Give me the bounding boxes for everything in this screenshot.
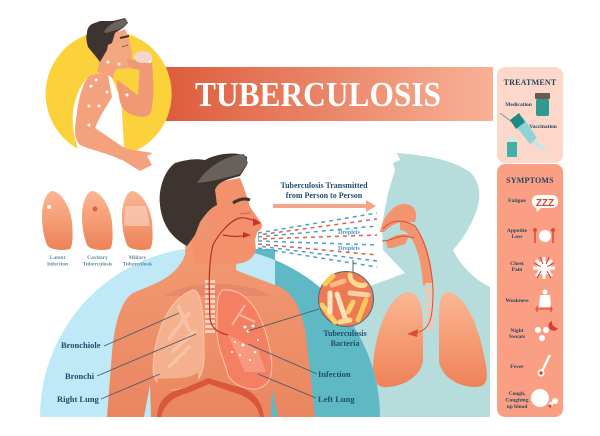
label: Cavitory bbox=[87, 255, 108, 261]
hair bbox=[160, 154, 247, 246]
ear bbox=[196, 214, 214, 238]
label: Latent bbox=[50, 255, 65, 261]
title banner bbox=[165, 67, 493, 121]
panel: treatment: Medication bbox=[505, 102, 532, 108]
labels: Bronchiole bbox=[61, 340, 101, 350]
label: Infection bbox=[47, 262, 68, 268]
tuberculosis bacteria label: Bacteria bbox=[331, 339, 359, 348]
ghost airway bbox=[380, 204, 433, 337]
panel: symptoms: Night bbox=[510, 328, 524, 334]
icon: fatigue speech bubble bbox=[532, 195, 558, 212]
head bbox=[178, 178, 262, 264]
labels: Right Lung bbox=[57, 394, 100, 404]
panel: symptoms: Sweats bbox=[509, 334, 525, 340]
labels: Bronchi bbox=[65, 371, 95, 381]
panel: symptoms: Weakness bbox=[505, 298, 529, 304]
panel: symptoms bbox=[497, 164, 563, 417]
title: TUBERCULOSIS bbox=[195, 75, 441, 114]
icon: coughing man on yellow circle bbox=[46, 18, 172, 171]
panel: treatment: Vaccination bbox=[529, 124, 557, 130]
panel: treatment bbox=[497, 67, 563, 163]
droplets labels bbox=[338, 230, 361, 252]
label: Tuberculosis bbox=[83, 262, 112, 268]
bacteria magnifier bbox=[318, 260, 374, 326]
panel: symptoms: Fatigue bbox=[508, 198, 526, 204]
icon: vial bbox=[507, 137, 517, 157]
main figure bbox=[107, 154, 315, 417]
diaphragm bbox=[157, 378, 264, 417]
torso bbox=[107, 232, 315, 417]
ghost silhouette second person bbox=[340, 153, 490, 417]
transmission arrow bbox=[273, 181, 376, 212]
left lung bbox=[217, 290, 272, 389]
heading: TREATMENT bbox=[504, 78, 557, 87]
small lung: miliary tuberculosis bbox=[122, 191, 153, 268]
ghost lungs bbox=[373, 292, 487, 387]
transmission label: from Person to Person bbox=[286, 191, 363, 200]
icon: plate and cutlery bbox=[533, 228, 555, 243]
small lung: latent infection bbox=[42, 191, 73, 268]
panel: symptoms: up blood bbox=[507, 404, 527, 410]
background semicircles bbox=[40, 247, 380, 417]
trachea bbox=[205, 280, 215, 335]
icon: medication jar bbox=[535, 93, 550, 116]
droplets labels: Droplets bbox=[338, 246, 361, 252]
heading: SYMPTOMS bbox=[506, 176, 554, 185]
icon: chest pain burst bbox=[533, 257, 555, 279]
icon: cough cloud bbox=[531, 389, 558, 408]
label: Miliary bbox=[129, 255, 147, 261]
labels bbox=[57, 340, 355, 404]
panel: symptoms: Cough, bbox=[509, 391, 526, 397]
panel: symptoms: Appetite bbox=[507, 228, 528, 234]
panel: symptoms: Fever bbox=[510, 364, 524, 370]
transmission label: Tuberculosis Transmitted bbox=[280, 181, 368, 190]
right lung bbox=[153, 290, 204, 390]
labels: Left Lung bbox=[318, 394, 355, 404]
panel: symptoms: Coughing bbox=[506, 398, 529, 404]
panel: symptoms: Pain bbox=[512, 267, 522, 273]
droplets labels: Droplets bbox=[338, 230, 361, 236]
icon: weakness figure bbox=[535, 290, 553, 312]
icon: night sweats bbox=[535, 321, 558, 341]
airway bbox=[209, 218, 260, 335]
panel: symptoms: Loss bbox=[512, 234, 522, 240]
labels: Infection bbox=[318, 369, 351, 379]
panel: symptoms: Chest bbox=[510, 261, 524, 267]
chest band bbox=[165, 284, 270, 296]
droplet spray bbox=[258, 213, 377, 267]
icon: fatigue speech bubble: ZZZ bbox=[536, 198, 554, 209]
icon: thermometer bbox=[538, 355, 550, 376]
small lung: cavitory tuberculosis bbox=[82, 191, 113, 268]
icon: syringe bbox=[500, 113, 545, 149]
tuberculosis bacteria label: Tuberculosis bbox=[323, 329, 367, 338]
label: Tuberculosis bbox=[123, 262, 152, 268]
leader lines bbox=[97, 309, 319, 399]
